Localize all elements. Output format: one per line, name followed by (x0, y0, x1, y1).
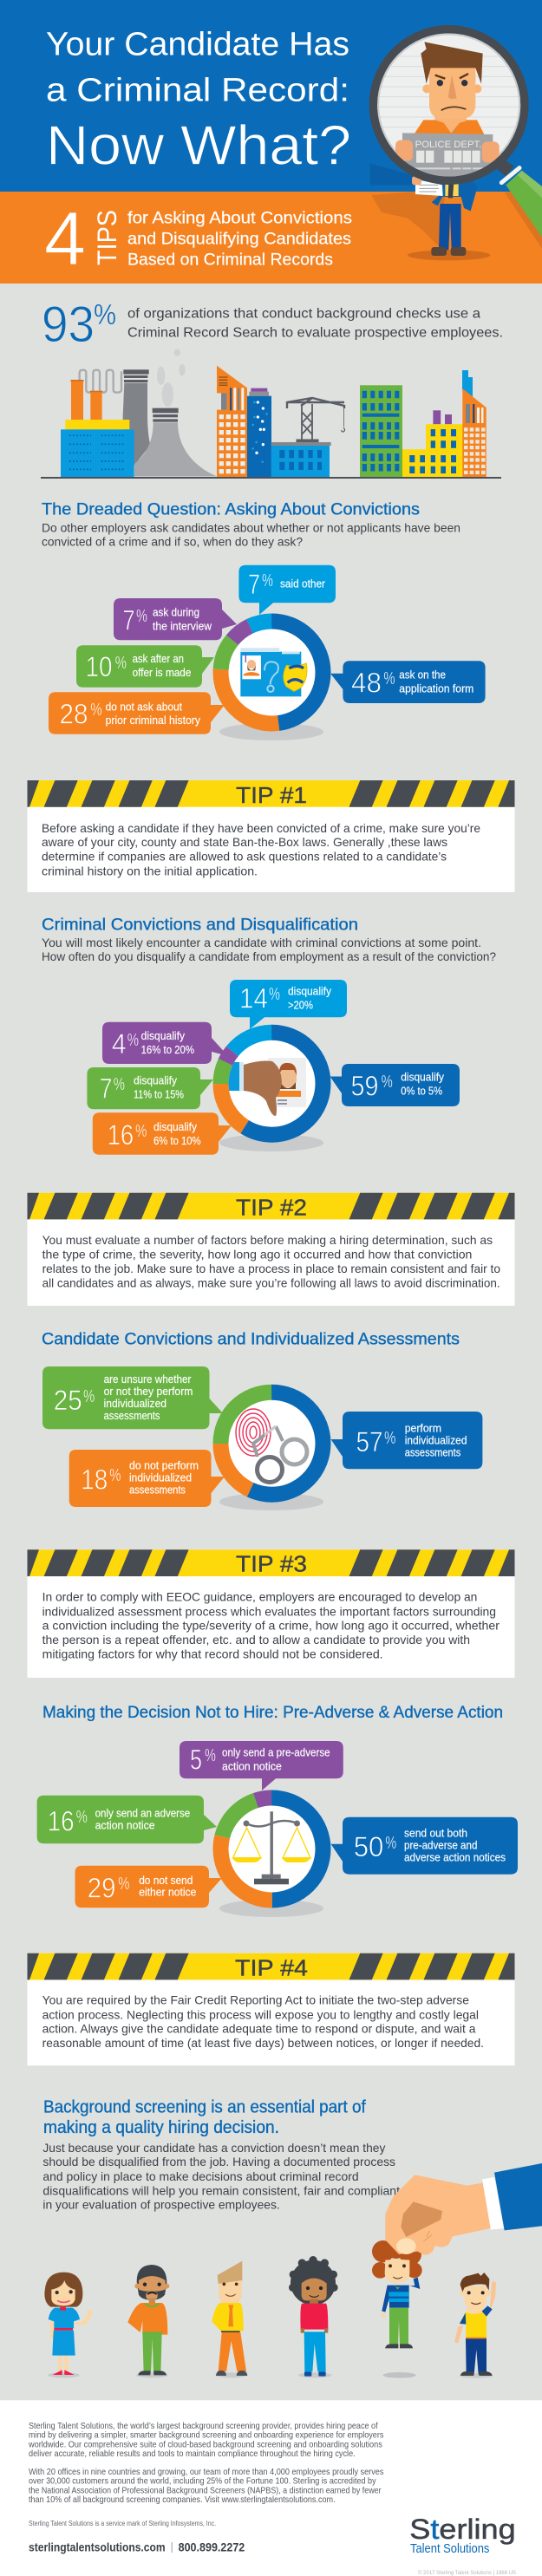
callout: 59% disqualify 0% to 5%: 0% to 5% (401, 1086, 442, 1098)
callout: 29% do not send either notice: % (118, 1875, 130, 1894)
callout: 10% ask after an offer is made: % (115, 654, 127, 673)
panel: tip 3: a conviction including the type/severity of a crime, how long ago it occurred, whether (42, 1618, 500, 1632)
section: Criminal Convictions and Disqualification: How often do you disqualify a candidate from employment as a result of the conviction? (42, 949, 496, 963)
panel: tip 3: mitigating factors for why that record should not be considered. (42, 1647, 383, 1660)
callout: 28% do not ask: prior criminal history (106, 714, 201, 727)
panel: tip 4 (28, 1953, 515, 2065)
callout: 57% perform: assessments (405, 1447, 460, 1459)
callout: 16% disqualify 6% to 10%: 6% to 10% (153, 1135, 201, 1147)
title: Your Candidate Has (46, 26, 349, 62)
green building (360, 385, 402, 477)
callout: 16% only send an adverse: % (76, 1808, 88, 1827)
crane (287, 398, 345, 442)
section: Background screening conclusion: Background screening is an essential part of (43, 2097, 366, 2117)
callout: 48% ask on the application form: % (383, 669, 395, 688)
orange tips banner: 4 (44, 197, 86, 281)
callout: 59% disqualify 0% to 5%: 59 (350, 1070, 378, 1101)
person: woman with afro (289, 2256, 338, 2377)
person: lifted candidate with curly hair (372, 2235, 422, 2378)
footer (0, 2400, 542, 2576)
callout: 18% do not perform: do not perform (129, 1460, 199, 1472)
panel: tip 3: In order to comply with EEOC guidance, employers are encouraged to develop an (42, 1590, 477, 1604)
panel: tip 1: Before asking a candidate if they have been convicted of a crime, make sure you’re (42, 821, 480, 835)
title: Now What? (46, 114, 351, 176)
section: Criminal Convictions and Disqualification (42, 916, 496, 963)
callout: 50% send out both: adverse action notices (404, 1852, 506, 1864)
callout: 16% only send an adverse (37, 1796, 217, 1843)
panel: tip 3: TIP #3 (236, 1551, 307, 1577)
panel: tip 4: TIP #4 (235, 1954, 308, 1980)
panel: tip 2: all candidates and as always, make sure you’re following all laws to avoid discrimination. (42, 1275, 500, 1289)
contact line: 800.899.2272 (179, 2541, 245, 2554)
footer description: deliver accurate, reliable results and tools to maintain compliance throughout the hiring cycle. (29, 2449, 356, 2459)
callout: 5% only send a pre-adverse: action notice (222, 1761, 282, 1773)
orange and blue towers (217, 366, 271, 477)
callout: 4% disqualify 16% to 20%: 16% to 20% (141, 1044, 194, 1056)
illustration: city skyline (41, 349, 501, 479)
callout: 14% disqualify >20%: % (269, 985, 280, 1004)
panel: tip 3: the person is a repeat offender, etc. and to allow a candidate to provide you with (42, 1633, 470, 1647)
callout: 7% disqualify 11% to 15%: % (114, 1075, 125, 1094)
callout: 16% disqualify 6% to 10% (93, 1112, 232, 1155)
footer description: Sterling Talent Solutions, the world’s largest background screening provider, provides hiring peace of (29, 2422, 378, 2431)
orange tips banner: TIPS (91, 210, 122, 265)
callout: 18% do not perform: individualized (129, 1471, 192, 1484)
callout: 16% disqualify 6% to 10%: % (135, 1122, 147, 1141)
callout: 10% ask after an offer is made (76, 645, 214, 688)
footer description (28, 2422, 383, 2527)
panel: tip 3: individualized assessment process which evaluates the important factors surrounding (42, 1604, 496, 1618)
orange tips banner: and Disqualifying Candidates (127, 230, 351, 249)
callout: 29% do not send either notice: either notice (139, 1887, 196, 1899)
section: The Dreaded Question: convicted of a crime and if so, when do they ask? (42, 534, 303, 548)
footer description: mind by delivering a simpler, smarter background screening and onboarding experience for employers (29, 2431, 383, 2441)
callout: 16% disqualify 6% to 10%: disqualify (153, 1121, 198, 1133)
section: Criminal Convictions and Disqualification: Criminal Convictions and Disqualification (42, 916, 358, 934)
callout: 28% do not ask: % (90, 701, 102, 720)
panel: tip 2: TIP #2 (236, 1195, 307, 1221)
callout: 16% only send an adverse: 16 (48, 1806, 75, 1837)
callout: 48% ask on the application form: 48 (351, 667, 382, 698)
callout: 16% only send an adverse: only send an adverse (95, 1807, 190, 1819)
logo: Sterling Talent Solutions (409, 2514, 516, 2556)
orange tips banner (0, 192, 542, 284)
callout: 25% unsure: are unsure whether (104, 1373, 191, 1386)
panel: tip 4: reasonable amount of time (at least five days) between notices, or longer if needed. (42, 2036, 484, 2050)
icon: application form with badge (240, 648, 307, 696)
donut chart: adverse action notices (219, 1798, 323, 1917)
factory group (61, 349, 217, 477)
callout: 7% ask during the interview: % (136, 607, 147, 626)
callout: 29% do not send either notice: 29 (88, 1872, 116, 1903)
illustration: man with police placard under magnifying glass: POLICE DEPT. (415, 140, 481, 150)
panel: tip 4: You are required by the Fair Credit Reporting Act to initiate the two-step adverse (42, 1993, 469, 2007)
panel: tip 2: the type of crime, the severity, how long ago it occurred and how that conviction (42, 1247, 472, 1261)
panel: tip 1: aware of your city, county and state Ban-the-Box laws. Generally ,these laws (42, 835, 447, 849)
section: Background screening conclusion: disqualifications will help you remain consistent, fair and compliant (42, 2183, 400, 2197)
footer description: Sterling Talent Solutions is a service mark of Sterling Infosystems, Inc. (29, 2520, 216, 2527)
callout: 4% disqualify 16% to 20%: disqualify (141, 1030, 186, 1042)
callout: 10% ask after an offer is made: ask after an (133, 653, 184, 665)
callout: 25% unsure: % (83, 1387, 95, 1406)
icon: handcuffs (253, 1426, 307, 1483)
donut chart: disqualification rates (219, 1033, 323, 1151)
section heading: Making the Decision Not to Hire: Making the Decision Not to Hire: Pre-Adverse & Adverse Action (42, 1704, 503, 1722)
person: boy in yellow shirt (454, 2273, 496, 2378)
title (46, 26, 351, 176)
low blue building (271, 442, 331, 477)
icon: thumbs down over candidate photo (228, 1058, 306, 1116)
callout: 7% ask during the interview: 7 (123, 605, 135, 636)
callout: 7% said other: said other (280, 577, 325, 590)
section: Criminal Convictions and Disqualification: You will most likely encounter a candidate with criminal convictions at some point. (42, 936, 481, 949)
section heading: Candidate Convictions and Individualized Assessments: Candidate Convictions and Individualized Assessments (42, 1331, 460, 1349)
callout: 50% send out both: 50 (354, 1831, 383, 1862)
section: The Dreaded Question: The Dreaded Question: Asking About Convictions (42, 500, 420, 518)
callout: 7% disqualify 11% to 15%: disqualify (134, 1075, 178, 1087)
callout: 7% ask during the interview: ask during (153, 607, 199, 619)
callout: 14% disqualify >20%: >20% (288, 999, 313, 1011)
footer description: the National Association of Professional Background Screeners (NAPBS), a distinction earned by fewer (29, 2486, 382, 2495)
callout: 59% disqualify 0% to 5% (330, 1064, 460, 1106)
callout: 7% ask during the interview (114, 598, 237, 640)
footer description: worldwide. Our comprehensive suite of cloud-based background screening and onboarding solutions (28, 2440, 382, 2449)
callout: 7% said other (238, 565, 336, 615)
callout: 7% disqualify 11% to 15%: 7 (100, 1073, 113, 1105)
stat: 93 percent: Criminal Record Search to evaluate prospective employees. (127, 325, 503, 340)
panel: tip 1 (28, 780, 515, 892)
callout: 50% send out both: send out both (404, 1828, 467, 1840)
footer description: With 20 offices in nine countries and growing, our team of more than 4,000 employees proudly serves (29, 2468, 383, 2477)
title: a Criminal Record: (46, 73, 349, 109)
panel: tip 2 (28, 1193, 515, 1306)
copyright: © 2017 Sterling Talent Solutions | 1868 US (418, 2570, 516, 2576)
callout: 25% unsure: 25 (54, 1385, 82, 1416)
callout: 48% ask on the application form (330, 661, 486, 703)
callout: 5% only send a pre-adverse: only send a pre-adverse (222, 1747, 330, 1759)
section: Background screening conclusion (42, 2097, 400, 2212)
callout: 57% perform: % (384, 1429, 396, 1448)
person: man with yellow shirt (212, 2261, 247, 2377)
callout: 25% unsure: assessments (104, 1410, 160, 1422)
callout: 48% ask on the application form: ask on the (399, 668, 446, 681)
section: Background screening conclusion: and policy in place to make decisions about criminal record (42, 2169, 359, 2183)
stat: 93 percent: 93 (42, 297, 95, 353)
callout: 18% do not perform: % (109, 1466, 121, 1485)
callout: 16% disqualify 6% to 10%: 16 (108, 1119, 134, 1151)
callout: 5% only send a pre-adverse (180, 1741, 343, 1790)
donut chart: when employers ask (219, 621, 323, 740)
orange tips banner: Based on Criminal Records (127, 251, 333, 270)
section: Background screening conclusion: in your evaluation of prospective employees. (42, 2198, 280, 2212)
callout: 7% ask during the interview: the interview (153, 621, 212, 633)
orange tips banner: for Asking About Convictions (127, 208, 352, 227)
stat: 93 percent: % (94, 298, 116, 330)
callout: 14% disqualify >20%: disqualify (288, 985, 332, 997)
icon: fingerprint (236, 1409, 271, 1456)
panel: tip 2: relates to the job. Make sure to have a process in place to remain consistent and fair to (42, 1262, 500, 1275)
panel: tip 1: criminal history on the initial application. (42, 864, 258, 877)
callout: 28% do not ask: do not ask about (106, 701, 182, 713)
callout: 18% do not perform (69, 1450, 225, 1507)
callout: 10% ask after an offer is made: 10 (85, 651, 113, 682)
callout: 5% only send a pre-adverse: % (205, 1746, 216, 1765)
icon: scales of justice (232, 1811, 310, 1884)
right orange tower (462, 370, 486, 477)
panel: tip 2: You must evaluate a number of factors before making a hiring determination, such as (42, 1233, 493, 1247)
panel: tip 1: determine if companies are allowed to ask questions related to a candidate’s (42, 849, 447, 863)
panel: tip 4: action. Always give the candidate adequate time to respond or dispute, and wait a (42, 2022, 476, 2036)
section: The Dreaded Question: Do other employers ask candidates about whether or not applicants have been (42, 520, 460, 534)
panel: tip 4: action process. Neglecting this process will expose you to lengthy and costly legal (42, 2007, 479, 2021)
callout: 57% perform: 57 (356, 1426, 383, 1458)
person: man in orange sweater (127, 2265, 169, 2377)
callout: 57% perform (331, 1412, 482, 1469)
illustration: large hand picking candidate (385, 2163, 542, 2255)
callout: 7% disqualify 11% to 15%: 11% to 15% (134, 1089, 184, 1101)
section: Background screening conclusion: Just because your candidate has a conviction doesn’t mean they (42, 2141, 385, 2155)
person: woman in blue dress (44, 2273, 93, 2377)
callout: 10% ask after an offer is made: offer is made (133, 667, 191, 679)
footer description: over 30,000 customers around the world, including 25% of the Fortune 100. Sterling is accredited by (29, 2477, 376, 2487)
callout: 59% disqualify 0% to 5%: % (382, 1073, 393, 1092)
section: The Dreaded Question (42, 500, 460, 548)
callout: 4% disqualify 16% to 20% (102, 1022, 228, 1064)
callout: 28% do not ask: 28 (59, 698, 88, 729)
callout: 16% only send an adverse: action notice (95, 1819, 155, 1831)
callout: 57% perform: perform (405, 1423, 441, 1435)
callout: 14% disqualify >20% (230, 980, 347, 1029)
stat: 93 percent: of organizations that conduct background checks use a (127, 307, 480, 322)
callout: 25% unsure: or not they perform (104, 1386, 193, 1398)
illustration: man with police placard under magnifying glass (370, 29, 542, 260)
panel: tip 3 (28, 1549, 515, 1678)
callout: 29% do not send either notice (75, 1866, 222, 1908)
callout: 50% send out both: pre-adverse and (404, 1840, 477, 1852)
callout: 5% only send a pre-adverse: 5 (190, 1745, 202, 1776)
callout: 18% do not perform: 18 (81, 1464, 108, 1496)
callout: 4% disqualify 16% to 20%: 4 (112, 1028, 127, 1060)
donut chart: individualized assessments (219, 1392, 323, 1510)
callout: 57% perform: individualized (405, 1435, 467, 1447)
callout: 14% disqualify >20%: 14 (239, 982, 268, 1014)
callout: 25% unsure (42, 1366, 223, 1429)
callout: 29% do not send either notice: do not send (139, 1875, 193, 1887)
stat: 93 percent (42, 297, 503, 353)
header banner (0, 0, 542, 192)
callout: 48% ask on the application form: application form (399, 682, 473, 695)
panel: tip 1: TIP #1 (236, 782, 307, 808)
logo: Sterling Talent Solutions: Sterling (409, 2514, 516, 2545)
callout: 28% do not ask (49, 692, 225, 734)
callout: 7% disqualify 11% to 15% (87, 1067, 213, 1109)
logo: Sterling Talent Solutions: Talent Solutions (410, 2542, 489, 2556)
yellow building and small factory (402, 410, 463, 477)
callout: 7% said other: 7 (248, 569, 260, 600)
callout: 50% send out both: % (385, 1834, 396, 1853)
footer description: than 10% of all background screening companies. Visit www.sterlingtalentsolutions.com. (29, 2495, 336, 2505)
callout: 7% said other: % (262, 571, 273, 590)
illustration: three candidates on the right with hand (289, 2163, 542, 2378)
illustration: three candidates on the left (44, 2261, 247, 2377)
section: Background screening conclusion: should be disqualified from the job. Having a documented process (42, 2155, 395, 2168)
section: Background screening conclusion: making a quality hiring decision. (43, 2117, 279, 2137)
contact line: sterlingtalentsolutions.com (29, 2541, 166, 2554)
callout: 59% disqualify 0% to 5%: disqualify (401, 1072, 445, 1084)
callout: 50% send out both (331, 1817, 518, 1875)
callout: 4% disqualify 16% to 20%: % (127, 1031, 139, 1050)
callout: 18% do not perform: assessments (129, 1484, 186, 1497)
callout: 25% unsure: individualized (104, 1398, 167, 1410)
